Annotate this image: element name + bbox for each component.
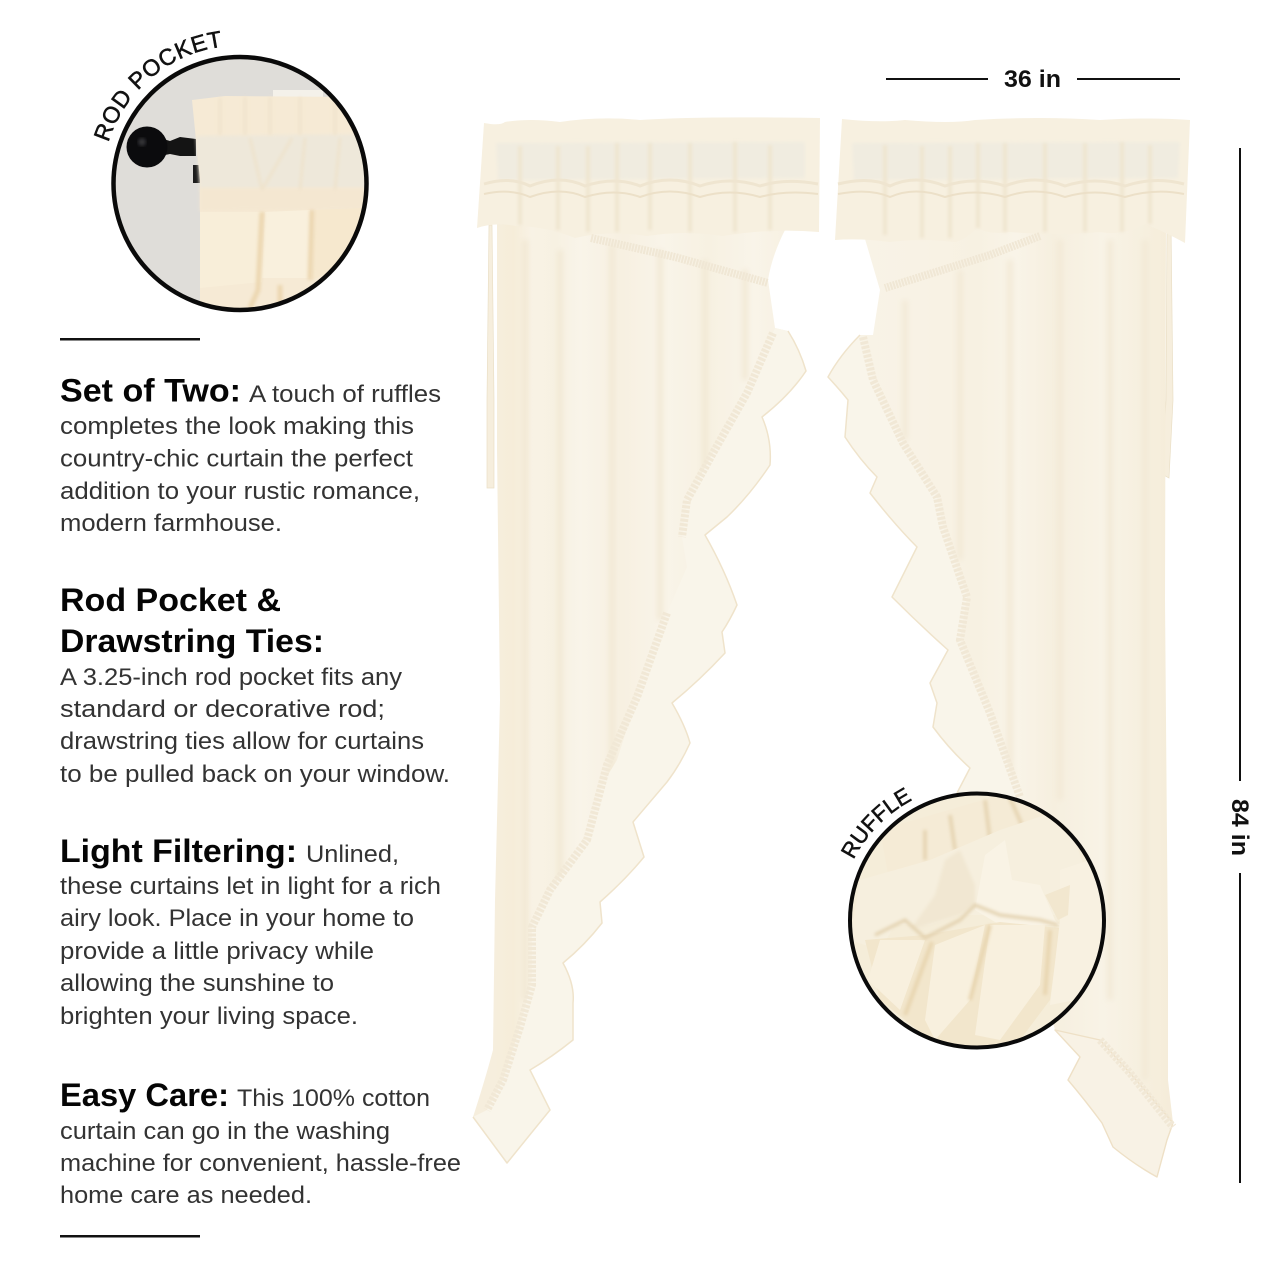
photo: ruffle close-up (852, 796, 1086, 1046)
dimension: width 36 in: 36 in (1004, 66, 1061, 93)
text block: easy care (60, 1077, 461, 1209)
ruffle: right curtain lower edge (1055, 1030, 1173, 1177)
text block: easy care: curtain can go in the washing (60, 1118, 390, 1145)
divider: bottom rule (60, 1235, 200, 1238)
ruffle: right curtain edge (828, 335, 1020, 800)
text block: light filtering: allowing the sunshine to (60, 970, 334, 997)
text block: rod pocket and drawstring ties (60, 582, 450, 788)
text block: light filtering: brighten your living space. (60, 1003, 358, 1030)
frame: ruffle circle (850, 794, 1104, 1048)
text block: set of two: country-chic curtain the perfect (60, 446, 413, 472)
ruffle gathers: right curtain seam (863, 337, 1173, 1127)
ruffle gathers: left curtain seam (487, 333, 773, 1110)
dimension: height 84 in: 84 in (1226, 799, 1253, 856)
text block: rod pocket and drawstring ties: drawstring ties allow for curtains (60, 728, 424, 755)
gathered band: right curtain (885, 236, 1040, 288)
text block: rod pocket and drawstring ties: Drawstring Ties: (60, 623, 324, 659)
gathered band: left curtain (591, 238, 768, 283)
text block: rod pocket and drawstring ties: A 3.25-inch rod pocket fits any (60, 664, 403, 691)
text block: light filtering: airy look. Place in your home to (60, 905, 414, 932)
text block: set of two: addition to your rustic romance, (60, 478, 420, 505)
tie: right curtain drawstring (1162, 225, 1173, 478)
divider: top rule (60, 338, 200, 340)
text block: rod pocket and drawstring ties: standard or decorative rod; (60, 696, 385, 723)
photo: rod pocket close-up (116, 59, 364, 308)
ruffle: left curtain edge (473, 328, 806, 1163)
frame: rod pocket circle (114, 57, 366, 310)
text block: light filtering: Unlined, (306, 841, 399, 868)
text block: easy care: machine for convenient, hassle-free (60, 1150, 461, 1177)
text block: set of two (60, 372, 441, 537)
text block: set of two: completes the look making this (60, 413, 414, 440)
label: ruffle: RUFFLE (840, 787, 912, 859)
fabric: lower ruffle drop (865, 922, 1059, 1046)
text block: rod pocket and drawstring ties: Rod Pocket & (60, 582, 281, 618)
text block: set of two: A touch of ruffles (249, 381, 441, 408)
panel: right curtain (828, 118, 1190, 1177)
text block: set of two: modern farmhouse. (60, 510, 282, 537)
text block: light filtering: Light Filtering: (60, 833, 297, 869)
tie: left curtain drawstring (487, 225, 494, 488)
folds: left curtain body shading (525, 240, 745, 1000)
icon: black curtain rod finial (126, 126, 202, 183)
callout: rod pocket detail (94, 30, 369, 312)
text block: set of two: Set of Two: (60, 372, 241, 408)
panel: left curtain (473, 117, 820, 1163)
text block: easy care: Easy Care: (60, 1077, 229, 1113)
valance: right curtain (835, 118, 1190, 243)
hem: left curtain ruffle outline (473, 331, 806, 1163)
label: rod pocket: ROD POCKET (94, 30, 220, 142)
text block: light filtering: provide a little privacy while (60, 938, 374, 965)
text block: easy care: home care as needed. (60, 1182, 312, 1209)
text block: rod pocket and drawstring ties: to be pulled back on your window. (60, 761, 450, 788)
text block: easy care: This 100% cotton (237, 1085, 430, 1112)
curtain body: right panel (828, 222, 1173, 1177)
text block: light filtering: these curtains let in light for a rich (60, 873, 441, 900)
valance: left curtain (477, 117, 820, 238)
folds: right curtain body shading (905, 240, 1145, 1080)
hem: right curtain ruffle outline (828, 335, 970, 793)
callout: ruffle detail (840, 787, 1106, 1050)
text block: light filtering (60, 833, 441, 1030)
curtain body: left panel (473, 222, 806, 1163)
